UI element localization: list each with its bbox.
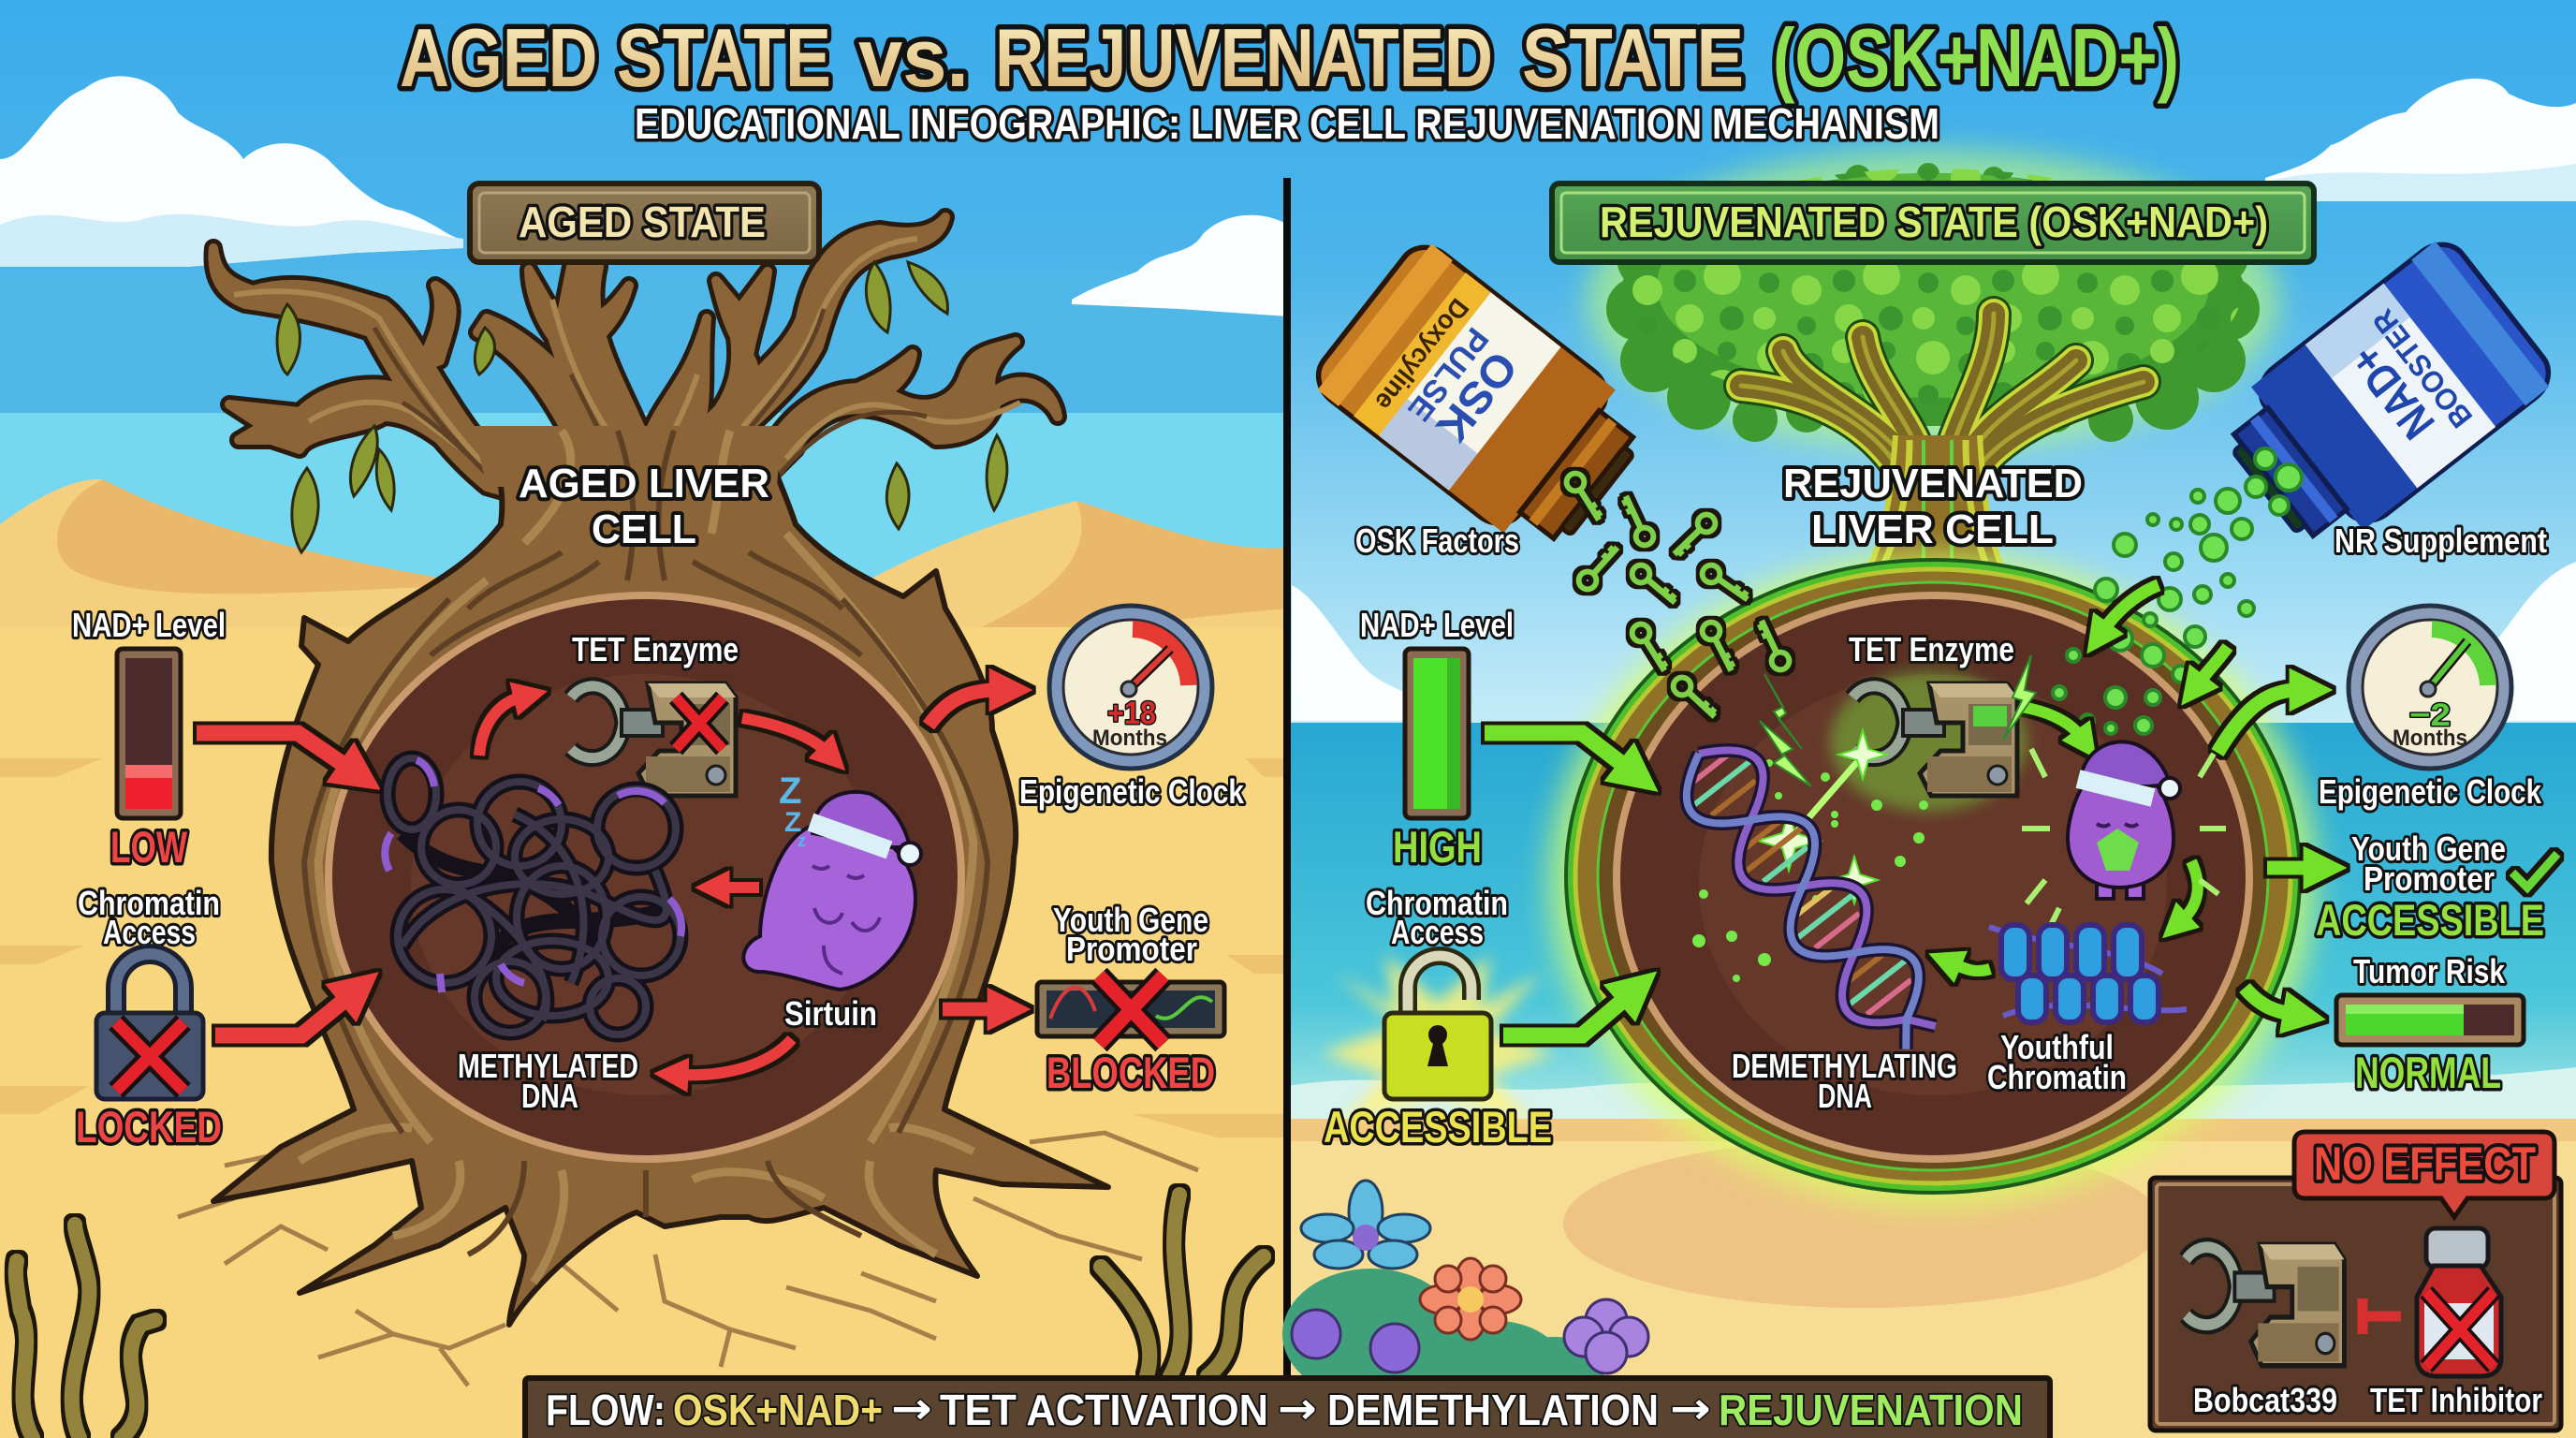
icon: sleeping sirtuin [743,792,921,990]
right: chromatin access label: Chromatin [1366,884,1508,922]
label: aged liver cell [519,461,769,552]
label: youth gene promoter rejuvenated: Promoter [2364,859,2495,898]
green arrows: cycle within rejuvenated cell [1954,707,2198,971]
label: youth gene promoter rejuvenated [2351,829,2506,898]
icon: sleep Z letters: Z [779,770,801,812]
icon: sleep Z letters [779,770,806,850]
flow bar: REJUVENATION [1719,1386,2023,1434]
status: normal: NORMAL [2355,1048,2501,1097]
callout: no effect tag: NO EFFECT [2314,1137,2536,1190]
left: LOW status: LOW [110,822,187,872]
icon: OSK pulse bottle: OSK [1427,342,1528,452]
right: chromatin access label: Access [1391,913,1484,951]
label: rejuvenated liver cell: LIVER CELL [1811,506,2054,552]
right: chromatin access label [1366,884,1508,951]
icon: epigenetic clock rejuvenated: −2 [2409,697,2451,733]
heading: rejuvenated state plaque [1552,183,2314,262]
right: HIGH status: HIGH [1393,822,1482,872]
icon: epigenetic clock aged: Months [1092,726,1167,751]
red arrows: cycle within aged cell [479,697,826,1075]
ground cracks [178,1133,1198,1386]
right: NAD+ level label: NAD+ Level [1360,606,1514,644]
icon: TET enzyme machine active [1830,671,2027,812]
icon: sleep Z letters: z [798,831,806,850]
flow bar [525,1378,2050,1438]
decoration: dry plants [16,1195,1264,1438]
title: vs. [858,11,969,104]
label: epigenetic clock aged: Epigenetic Clock [1019,772,1245,811]
heading: rejuvenated state plaque: REJUVENATED STATE (OSK+NAD+) [1600,198,2268,246]
panel: no effect inhibitor box [2150,1178,2561,1431]
label: youthful chromatin [1987,1028,2127,1096]
icon: sleep Z letters: Z [784,807,801,838]
icon: locked padlock [96,954,203,1099]
icon: blocked promoter signal [1037,976,1224,1044]
icon: epigenetic clock rejuvenated [2349,606,2511,769]
green arrows: outputs from rejuvenated cell [2217,690,2312,1014]
subtitle: EDUCATIONAL INFOGRAPHIC: LIVER CELL REJUVENATION MECHANISM [635,99,1939,148]
label: Bobcat339: Bobcat339 [2193,1381,2337,1419]
label: youth gene promoter aged: Promoter [1066,930,1197,968]
icon: NAD+ booster bottle: NAD+ [2340,336,2444,449]
icon: TET enzyme machine blocked [571,683,736,796]
title: AGED STATE [400,11,831,104]
left: NAD+ level label: NAD+ Level [72,606,226,644]
green arrows: NAD+ flowing into cell [2104,585,2228,682]
icon: epigenetic clock rejuvenated: Months [2393,726,2467,751]
divider between panels [1283,178,1291,1381]
label: youth gene promoter aged: Youth Gene [1053,901,1208,939]
decoration: flowers [1282,1181,1648,1400]
OSK factor keys falling into the cell [1563,470,1792,723]
left: chromatin access label: Access [103,913,196,951]
label: rejuvenated liver cell: REJUVENATED [1783,461,2083,506]
right: NAD+ level bar gauge [1405,649,1469,818]
icon: open padlock with glow [1322,955,1554,1123]
title: STATE [1522,11,1744,104]
flow bar: TET ACTIVATION [940,1386,1268,1434]
flow bar: OSK+NAD+ [673,1386,883,1434]
flow bar: DEMETHYLATION [1327,1386,1659,1434]
background: right beach scene [1288,0,2576,1438]
status: blocked: BLOCKED [1046,1048,1215,1097]
title: (OSK+NAD+) [1773,11,2179,104]
label: OSK factors: OSK Factors [1355,521,1519,560]
left: NAD+ level bar gauge [117,649,181,818]
label: methylated DNA: DNA [521,1077,578,1115]
label: youth gene promoter rejuvenated: Youth Gene [2351,829,2506,868]
red arrows: inputs to aged cell [197,733,348,1035]
label: methylated DNA [458,1047,638,1115]
icon: OSK pulse bottle: PULSE [1401,321,1496,429]
chart: tangled methylated DNA [385,758,681,1034]
label: methylated DNA: METHYLATED [458,1047,638,1085]
tree: aged tree branches [212,217,1058,506]
label: TET inhibitor: TET Inhibitor [2370,1381,2542,1419]
panel: aged liver cell interior [329,595,961,1159]
background: left desert scene [0,0,1288,1438]
red arrows: outputs from aged cell [929,690,998,1009]
label: youthful chromatin: Chromatin [1987,1058,2127,1096]
icon: youthful chromatin nucleosomes [1989,925,2187,1022]
label: rejuvenated liver cell [1783,461,2083,552]
label: TET enzyme rejuvenated: TET Enzyme [1849,630,2014,668]
label: TET enzyme aged: TET Enzyme [572,630,739,668]
label: aged liver cell: CELL [592,506,696,552]
left: LOCKED status: LOCKED [76,1102,222,1152]
right: accessible status: ACCESSIBLE [1324,1102,1552,1152]
flow bar: → [1278,1383,1317,1433]
icon: OSK pulse bottle: Doxycyline [1369,293,1475,417]
icon: epigenetic clock aged [1049,606,1212,769]
heading: aged state plaque: AGED STATE [519,198,766,246]
icon: active sirtuin [2068,741,2180,899]
sirtuin activation rays [2022,749,2226,927]
label: youthful chromatin: Youthful [2000,1028,2114,1066]
clouds [0,76,2576,721]
title: REJUVENATED [995,11,1493,104]
activation bolts and sparks [1692,655,2036,982]
flow bar: → [1670,1383,1711,1433]
icon: OSK pulse bottle [1307,236,1660,568]
label: demethylating DNA: DEMETHYLATING [1732,1047,1957,1085]
green arrows: inputs to rejuvenated cell [1485,733,1627,1035]
icon: TET inhibitor bottle crossed out [2417,1228,2501,1376]
tree: aged tree leaves [277,262,1007,552]
chart: tumor risk bar [2336,995,2524,1045]
label: tumor risk: Tumor Risk [2353,952,2506,990]
label: youth gene promoter aged [1053,901,1208,968]
tree: aged trunk and roots [213,426,1108,1325]
flow bar: FLOW: [546,1386,666,1434]
flow bar: → [891,1383,932,1433]
title [400,11,2179,104]
tree: rejuvenated trunk and branches [1676,314,2190,712]
callout: no effect tag [2294,1132,2554,1217]
label: aged liver cell: AGED LIVER [519,461,769,506]
icon: NAD+ booster bottle [2207,233,2560,565]
tree: rejuvenated canopy [1587,150,2279,449]
icon: NAD+ booster bottle: BOOSTER [2365,302,2479,434]
icon: Bobcat339 machine [2186,1244,2344,1366]
NR supplement particles [2053,448,2302,734]
icon: green check mark [2512,854,2557,888]
label: demethylating DNA: DNA [1818,1077,1872,1115]
left: chromatin access label: Chromatin [78,884,220,922]
heading: aged state plaque [470,183,819,262]
panel: rejuvenated liver cell with glowing ring [1549,552,2317,1208]
left: chromatin access label [78,884,220,951]
icon: inhibition bar [2363,1299,2401,1334]
icon: epigenetic clock aged: +18 [1107,696,1156,731]
label: demethylating DNA [1732,1047,1957,1115]
chart: demethylating DNA helix [1666,727,1954,1064]
label: sirtuin aged: Sirtuin [784,994,877,1033]
